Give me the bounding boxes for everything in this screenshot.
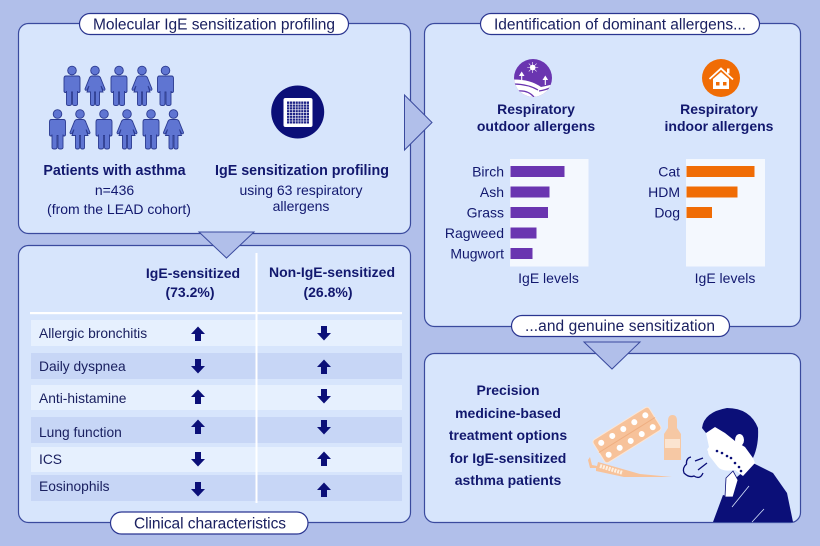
- row: eosinophils: [39, 479, 331, 497]
- heading pill: identification: Identification of dominant allergens...: [494, 16, 746, 34]
- panel: molecular profiling: [18, 24, 410, 234]
- text: patients with asthma: n=436: [95, 182, 134, 198]
- icon: cough puff: [683, 457, 707, 477]
- heading: indoor allergens: Respiratory: [680, 101, 758, 117]
- heading: indoor allergens: [665, 101, 774, 134]
- row: daily dyspnea: [39, 359, 331, 374]
- panel: clinical characteristics: [18, 246, 410, 522]
- table header: IgE-sensitized: IgE-sensitized: [146, 265, 240, 281]
- text: IgE sensitization profiling: [215, 163, 389, 214]
- bar chart: outdoor allergens: Birch: [472, 164, 504, 180]
- bar chart: outdoor allergens: Ash: [480, 184, 504, 200]
- text: precision medicine: for IgE-sensitized: [450, 450, 566, 466]
- icon: blister pack: [592, 406, 662, 464]
- text: patients with asthma: Patients with asthma: [43, 163, 187, 179]
- bar chart: outdoor allergens: Grass: [467, 204, 504, 220]
- heading pill: clinical characteristics: Clinical characteristics: [134, 516, 286, 532]
- bar chart: indoor allergens: [648, 159, 765, 286]
- row: ICS: ICS: [39, 452, 62, 467]
- panel: dominant allergens: [424, 24, 800, 326]
- bar chart: outdoor allergens: IgE levels: [518, 270, 579, 286]
- text: IgE sensitization profiling: allergens: [273, 198, 329, 214]
- row: lung function: [39, 420, 331, 440]
- icon: allergen microarray: [271, 86, 324, 138]
- bar chart: outdoor allergens: Ragweed: [445, 225, 504, 241]
- row: anti-histamine: [39, 389, 331, 406]
- row: lung function: Lung function: [39, 425, 122, 440]
- text: precision medicine: asthma patients: [455, 472, 562, 488]
- text: patients with asthma: (from the LEAD cohort): [47, 201, 191, 217]
- row: allergic bronchitis: [39, 326, 331, 341]
- table header: IgE-sensitized: [146, 265, 240, 300]
- arrow: to allergens: [404, 95, 432, 150]
- row: daily dyspnea: Daily dyspnea: [39, 359, 126, 374]
- heading: outdoor allergens: outdoor allergens: [477, 118, 595, 134]
- text: IgE sensitization profiling: IgE sensitization profiling: [215, 163, 389, 179]
- heading: outdoor allergens: Respiratory: [497, 101, 575, 117]
- bar chart: indoor allergens: IgE levels: [695, 270, 755, 286]
- heading pill: molecular profiling: Molecular IgE sensitization profiling: [93, 16, 335, 34]
- icon: patients group: [50, 66, 184, 149]
- bar chart: indoor allergens: Cat: [658, 164, 680, 180]
- bar chart: indoor allergens: HDM: [648, 184, 680, 200]
- text: patients with asthma: [43, 163, 191, 217]
- bar chart: outdoor allergens: Mugwort: [450, 246, 504, 262]
- bar chart: indoor allergens: Dog: [654, 204, 680, 220]
- icon: coughing man: [702, 408, 793, 522]
- row: anti-histamine: Anti-histamine: [39, 391, 127, 406]
- icon: dropper bottle: [664, 415, 681, 460]
- row: allergic bronchitis: Allergic bronchitis: [39, 326, 147, 341]
- text: precision medicine: medicine-based: [455, 405, 561, 421]
- arrow: to treatment options: [584, 342, 640, 369]
- heading: indoor allergens: indoor allergens: [665, 118, 774, 134]
- icon: outdoor landscape: [514, 59, 552, 97]
- icon: indoor house: [702, 59, 740, 97]
- heading pill: clinical characteristics: [110, 512, 308, 534]
- heading pill: genuine sensitization: ...and genuine sensitization: [525, 318, 715, 335]
- icon: syringe: [588, 457, 672, 477]
- text: precision medicine: [449, 382, 567, 488]
- heading: outdoor allergens: [477, 101, 595, 134]
- table header: Non-IgE-sensitized: Non-IgE-sensitized: [269, 264, 395, 280]
- bar chart: outdoor allergens: [445, 159, 588, 286]
- panel: treatment options: [424, 354, 800, 522]
- text: precision medicine: Precision: [476, 382, 540, 398]
- row: ICS: [39, 452, 331, 467]
- text: IgE sensitization profiling: using 63 respiratory: [240, 182, 362, 198]
- table header: Non-IgE-sensitized: [269, 264, 395, 300]
- arrow: to clinical characteristics: [199, 232, 254, 258]
- table header: Non-IgE-sensitized: (26.8%): [303, 284, 353, 300]
- table header: IgE-sensitized: (73.2%): [165, 284, 215, 300]
- row: eosinophils: Eosinophils: [39, 479, 110, 494]
- text: precision medicine: treatment options: [449, 427, 567, 443]
